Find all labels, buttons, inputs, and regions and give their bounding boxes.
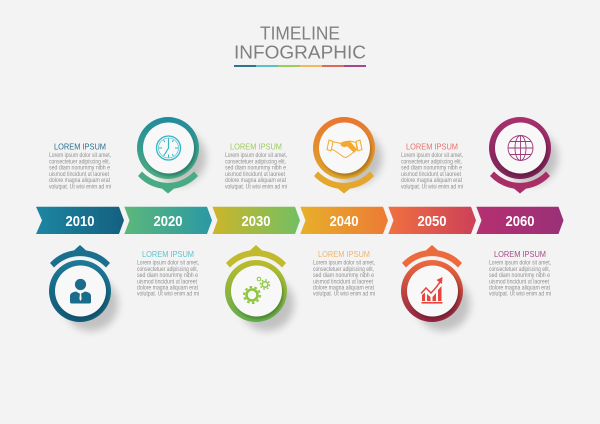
text block 2010 xyxy=(49,142,111,190)
text block 2050: consectetuer adipiscing elit, xyxy=(401,159,462,165)
icon: gears xyxy=(244,277,270,303)
text block 2030: sed diam nonummy nibh e xyxy=(225,166,287,172)
timeline arrow 2030 xyxy=(212,207,300,234)
text block 2010: Lorem ipsum dolor sit amet, xyxy=(49,153,111,159)
text block 2060: sed diam nonummy nibh e xyxy=(489,273,551,279)
badge 2060 xyxy=(489,117,558,194)
text block 2050: dolore magna aliquam erat xyxy=(401,178,462,184)
title xyxy=(234,22,366,62)
badge 2040 xyxy=(313,117,382,194)
title rainbow underline xyxy=(234,65,366,67)
text block 2050: sed diam nonummy nibh e xyxy=(401,166,463,172)
text block 2010: volutpat. Ut wisi enim ad mi xyxy=(49,184,111,190)
text block 2010: consectetuer adipiscing elit, xyxy=(49,159,110,165)
text block 2020: uismod tincidunt ut laoreet xyxy=(137,279,197,285)
timeline arrow 2060: 2060 xyxy=(506,214,534,230)
icon: clock xyxy=(156,136,180,160)
text block 2030: volutpat. Ut wisi enim ad mi xyxy=(225,184,287,190)
text block 2010: uismod tincidunt ut laoreet xyxy=(49,172,109,178)
timeline arrow 2020: 2020 xyxy=(154,214,182,230)
text block 2040: uismod tincidunt ut laoreet xyxy=(313,279,373,285)
text block 2050 xyxy=(401,142,463,190)
text block 2050: Lorem ipsum dolor sit amet, xyxy=(401,153,463,159)
icon: business person xyxy=(70,279,91,304)
text block 2010: sed diam nonummy nibh e xyxy=(49,166,111,172)
text block 2040: dolore magna aliquam erat xyxy=(313,285,374,291)
text block 2040 xyxy=(313,249,375,298)
text block 2020: LOREM IPSUM xyxy=(142,249,194,259)
text block 2040: LOREM IPSUM xyxy=(318,249,370,259)
text block 2030: consectetuer adipiscing elit, xyxy=(225,159,286,165)
text block 2060: consectetuer adipiscing elit, xyxy=(489,267,550,273)
text block 2020 xyxy=(137,249,199,298)
title: TIMELINE xyxy=(260,22,340,44)
badge 2020 xyxy=(137,117,206,194)
text block 2030 xyxy=(225,142,287,190)
text block 2060 xyxy=(489,249,551,298)
timeline arrow 2010 xyxy=(36,207,124,234)
timeline arrow 2050 xyxy=(388,207,476,234)
timeline arrow 2020 xyxy=(124,207,212,234)
text block 2050: uismod tincidunt ut laoreet xyxy=(401,172,461,178)
text block 2050: LOREM IPSUM xyxy=(406,142,458,152)
text block 2020: sed diam nonummy nibh e xyxy=(137,273,199,279)
timeline arrow 2030: 2030 xyxy=(242,214,270,230)
text block 2040: volutpat. Ut wisi enim ad mi xyxy=(313,292,375,298)
text block 2040: sed diam nonummy nibh e xyxy=(313,273,375,279)
text block 2020: Lorem ipsum dolor sit amet, xyxy=(137,261,199,267)
text block 2040: consectetuer adipiscing elit, xyxy=(313,267,374,273)
text block 2030: uismod tincidunt ut laoreet xyxy=(225,172,285,178)
text block 2010: LOREM IPSUM xyxy=(54,142,106,152)
icon: globe xyxy=(508,136,533,160)
badge 2050 xyxy=(401,245,470,331)
text block 2060: dolore magna aliquam erat xyxy=(489,285,550,291)
text block 2060: Lorem ipsum dolor sit amet, xyxy=(489,261,551,267)
timeline arrow 2060 xyxy=(476,207,564,234)
icon: handshake xyxy=(327,140,362,157)
badge 2030 xyxy=(225,245,294,331)
timeline arrow 2050: 2050 xyxy=(418,214,446,230)
timeline arrow 2010: 2010 xyxy=(66,214,94,230)
text block 2060: uismod tincidunt ut laoreet xyxy=(489,279,549,285)
text block 2050: volutpat. Ut wisi enim ad mi xyxy=(401,184,463,190)
text block 2060: LOREM IPSUM xyxy=(494,249,546,259)
text block 2030: dolore magna aliquam erat xyxy=(225,178,286,184)
text block 2060: volutpat. Ut wisi enim ad mi xyxy=(489,292,551,298)
timeline arrow 2040 xyxy=(300,207,388,234)
text block 2020: dolore magna aliquam erat xyxy=(137,285,198,291)
text block 2010: dolore magna aliquam erat xyxy=(49,178,110,184)
text block 2030: Lorem ipsum dolor sit amet, xyxy=(225,153,287,159)
text block 2020: volutpat. Ut wisi enim ad mi xyxy=(137,292,199,298)
icon: growth chart xyxy=(421,277,442,304)
title: INFOGRAPHIC xyxy=(234,42,366,62)
timeline arrow 2040: 2040 xyxy=(330,214,358,230)
text block 2020: consectetuer adipiscing elit, xyxy=(137,267,198,273)
text block 2040: Lorem ipsum dolor sit amet, xyxy=(313,261,375,267)
text block 2030: LOREM IPSUM xyxy=(230,142,282,152)
badge 2010 xyxy=(49,245,118,331)
